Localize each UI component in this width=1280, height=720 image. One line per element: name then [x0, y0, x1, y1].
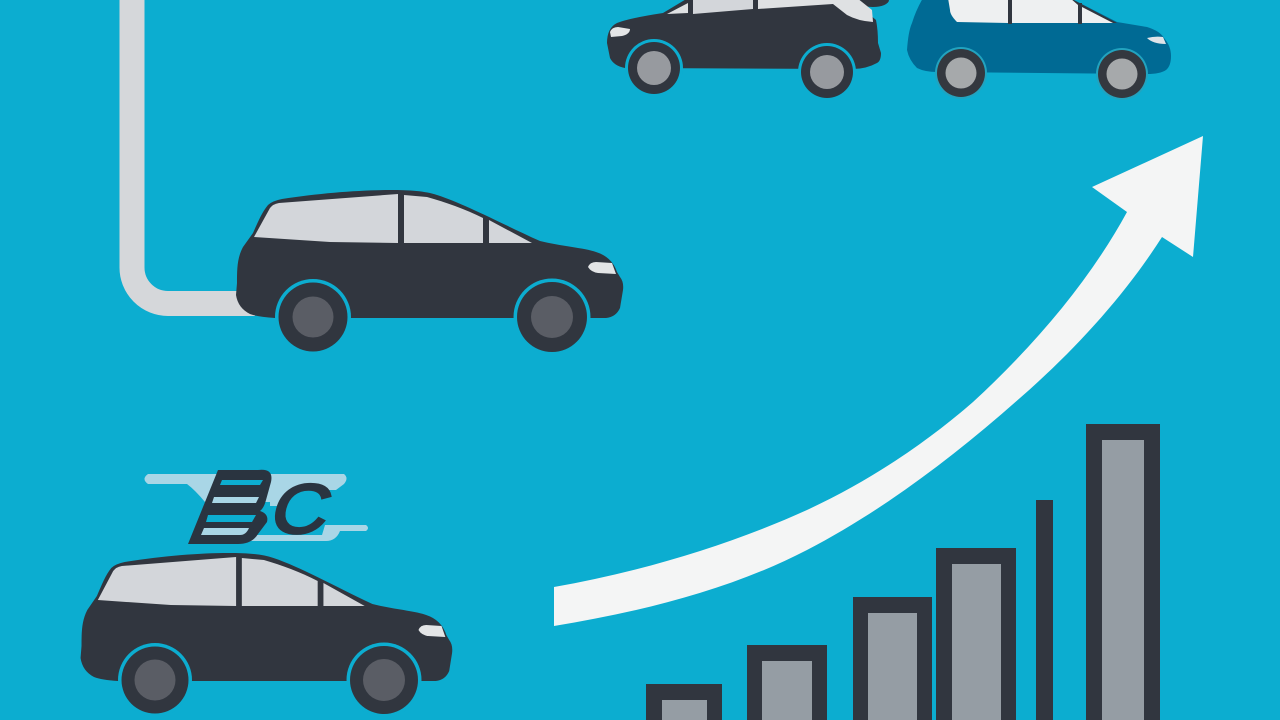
- bar chart: [646, 424, 1160, 720]
- logo: BC with speed swooshes: B: [177, 450, 290, 566]
- bar 1: [646, 684, 722, 720]
- car: dark top centre: [607, 0, 889, 101]
- bar 6: [1086, 424, 1160, 720]
- car: large dark bottom-left: [81, 553, 452, 718]
- bar 4: [936, 548, 1016, 720]
- bar 3: [853, 597, 932, 720]
- bar 5: [1036, 500, 1053, 720]
- car: blue top right: [907, 0, 1171, 100]
- logo: BC with speed swooshes: C: [263, 470, 341, 548]
- bar 2: [747, 645, 827, 720]
- rising arrow: [554, 136, 1203, 626]
- logo: BC with speed swooshes: [144, 450, 368, 566]
- car: large dark centre-left: [236, 190, 623, 356]
- pipe connecting to the car: [132, 0, 255, 304]
